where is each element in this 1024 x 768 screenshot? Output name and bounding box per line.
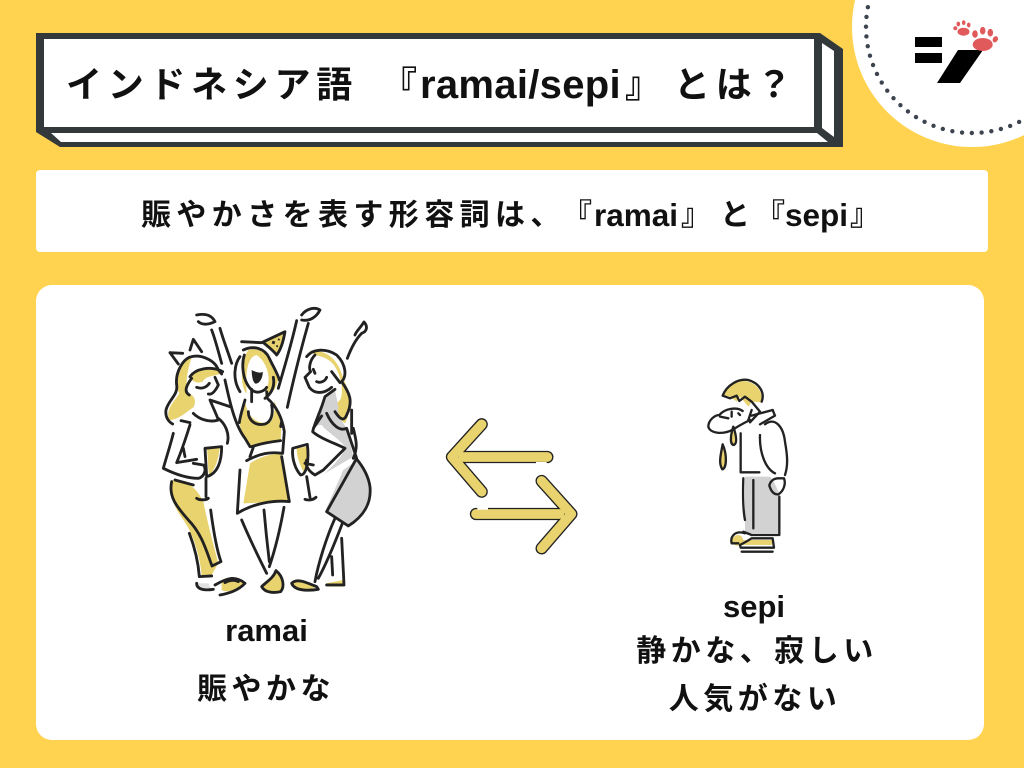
label: ramai: ramai (225, 613, 308, 648)
subtitle panel (36, 170, 988, 252)
woman right (347, 322, 366, 458)
label: ramai meaning: 賑やかな (197, 673, 335, 706)
illustration: sepi lonely person (708, 380, 787, 552)
woman left (166, 339, 202, 424)
logo badge (852, 0, 1024, 147)
title: ？ (756, 64, 792, 105)
title box (36, 33, 843, 147)
title: インドネシア語 (66, 64, 358, 105)
panel: comparison (36, 285, 984, 740)
subtitle: ramai (594, 197, 678, 233)
title: とは (674, 64, 757, 105)
label: sepi: sepi (723, 589, 785, 624)
subtitle: 賑やかさを表す形容詞は、 (141, 199, 566, 232)
title: 『 (381, 64, 417, 105)
title: 』 (625, 64, 661, 105)
label: sepi meaning 1: 静かな、寂しい (636, 635, 878, 668)
illustration: ramai party group (163, 308, 370, 595)
title: ramai/sepi (420, 63, 621, 107)
subtitle: と (720, 199, 750, 232)
label: sepi meaning 2: 人気がない (669, 682, 841, 716)
subtitle: 『 (562, 199, 592, 232)
subtitle: sepi (785, 197, 848, 233)
woman centre (197, 314, 232, 363)
subtitle: 『 (755, 199, 785, 232)
subtitle: 』 (850, 199, 880, 232)
arrows: ramai and sepi are opposites (452, 424, 571, 548)
subtitle: 』 (681, 199, 711, 232)
